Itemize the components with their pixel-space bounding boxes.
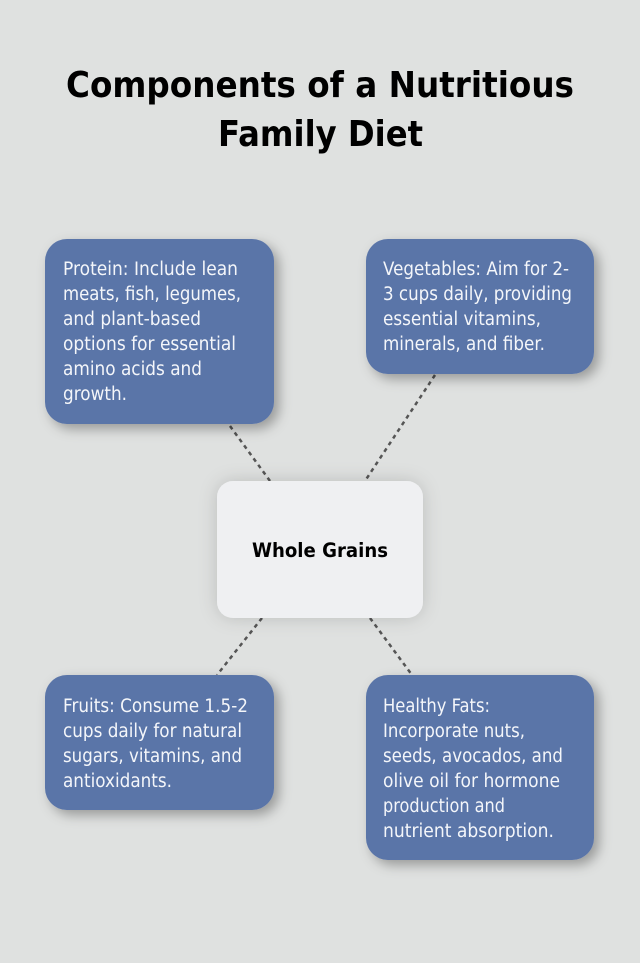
panel: vegetables: minerals, and fiber. [383, 334, 545, 355]
panel: protein [45, 239, 274, 424]
connector: healthy fats to center [370, 618, 412, 675]
title: Components of a Nutritious [66, 65, 574, 106]
panel: vegetables: essential vitamins, [383, 309, 541, 330]
panel: fruits: cups daily for natural [63, 721, 242, 742]
panel: healthy fats: nutrient absorption. [383, 821, 554, 842]
connector: protein to center [230, 426, 270, 481]
panel: vegetables: 3 cups daily, providing [383, 284, 572, 305]
panel: healthy fats [366, 675, 594, 860]
panel: healthy fats: production and [383, 796, 505, 817]
connector: vegetables to center [365, 375, 435, 481]
panel: protein: meats, fish, legumes, [63, 284, 241, 305]
panel: fruits: sugars, vitamins, and [63, 746, 242, 767]
panel: healthy fats: olive oil for hormone [383, 771, 560, 792]
panel: healthy fats: Healthy Fats: [383, 696, 490, 717]
panel: fruits: Fruits: Consume 1.5-2 [63, 696, 248, 717]
title: Family Diet [218, 114, 423, 155]
panel: protein: amino acids and [63, 359, 202, 380]
panel: center whole grains: Whole Grains [252, 539, 388, 562]
panel: fruits [45, 675, 274, 810]
panel: protein: Protein: Include lean [63, 259, 238, 280]
title [66, 65, 574, 155]
panel: healthy fats: seeds, avocados, and [383, 746, 563, 767]
panel: protein: options for essential [63, 334, 236, 355]
panel: center whole grains [217, 481, 423, 618]
panel: healthy fats: Incorporate nuts, [383, 721, 525, 742]
panel: protein: growth. [63, 384, 127, 405]
panel: fruits: antioxidants. [63, 771, 172, 792]
panel: protein: and plant-based [63, 309, 201, 330]
panel: vegetables [366, 239, 594, 374]
panel: vegetables: Vegetables: Aim for 2- [383, 259, 569, 280]
connector: fruits to center [217, 618, 262, 675]
